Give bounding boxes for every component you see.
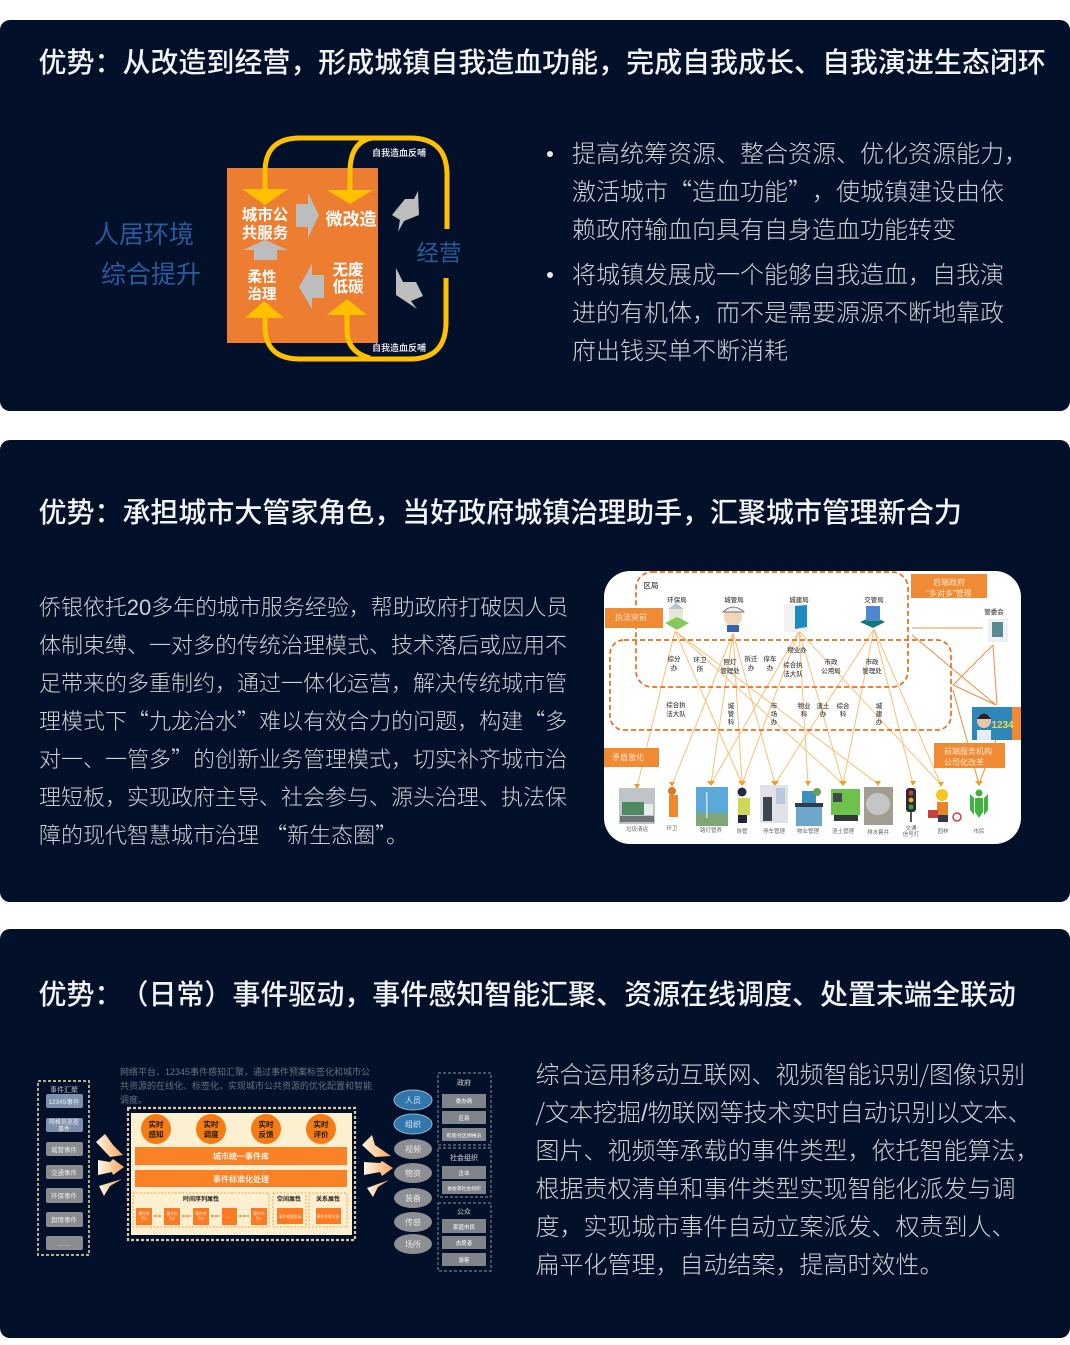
white card (604, 571, 1021, 844)
heading: panel 1: 优势：从改造到经营，形成城镇自我造血功能，完成自我成长、自我演进生态闭环 (38, 47, 1046, 78)
resource ovals: 场所 (405, 1239, 421, 1249)
organisation groups (438, 1073, 491, 1271)
bottom icon captions: 市民 (973, 827, 985, 835)
square labels: 共服务 (242, 223, 289, 242)
description text: 共资源的在线化、标签化，实现城市公共资源的优化配置和智能 (120, 1080, 372, 1091)
central platform: …… (225, 1215, 233, 1219)
central platform: 感知 (148, 1129, 164, 1139)
grey arrows (243, 191, 423, 309)
central platform (128, 1108, 355, 1240)
central platform: 事件关联关系 (317, 1214, 340, 1219)
text block: panel 2 paragraph: 障的现代智慧城市治理 “新生态圈”。 (39, 818, 408, 850)
text block: panel 2 paragraph: 对一、一管多”的创新业务管理模式，切实补齐城市治 (39, 742, 567, 774)
central platform: 空间属性 (277, 1195, 301, 1203)
network diagram: 后端政府 (933, 577, 965, 587)
text block: panel 3 paragraph: 综合运用移动互联网、视频智能识别/图像识别 (536, 1055, 1025, 1090)
description text: 调度。 (120, 1094, 147, 1105)
agency labels: 城 (728, 702, 735, 710)
central platform: 列3 (198, 1216, 204, 1221)
network diagram: 矛盾激化 (612, 752, 644, 762)
agency labels: 交管局 (864, 595, 884, 604)
network diagram: “多对多”管理 (926, 588, 972, 598)
panel: city steward (0, 440, 1070, 902)
central platform: 事件库 (195, 1211, 207, 1216)
agency labels: 管 (728, 709, 735, 718)
agency labels: 环保局 (667, 595, 687, 604)
central platform: 调度 (204, 1129, 219, 1139)
central platform: 事件库 (138, 1211, 150, 1216)
organisation groups: 公众 (457, 1208, 471, 1216)
agency labels: 城建局 (789, 595, 809, 604)
agency labels: 管委会 (984, 607, 1004, 616)
feedback labels: 自我造血反哺 (372, 342, 426, 353)
central platform: 列2 (169, 1216, 175, 1221)
central platform: 反馈 (258, 1129, 274, 1139)
agency labels: 场 (771, 710, 778, 718)
bottom icon captions: 协管 (736, 827, 748, 835)
text block: panel 1 bullets: 赖政府输血向具有自身造血功能转变 (572, 217, 956, 244)
agency labels: 市政 (866, 657, 879, 666)
square labels (242, 205, 376, 303)
bottom icon captions: 物业管理 (797, 827, 819, 835)
organisation groups: 志愿者 (456, 1239, 473, 1247)
panel: self-growth ecosystem (0, 20, 1070, 411)
resource ovals: 组织 (405, 1119, 421, 1129)
agency labels: 环卫 (694, 656, 707, 664)
feedback labels: 自我造血反哺 (372, 147, 426, 158)
bottom icon captions: 垃圾清运 (626, 825, 648, 833)
organisation groups: 游客 (458, 1256, 470, 1264)
text block: panel 1 bullets: 将城镇发展成一个能够自我造血，自我演 (572, 262, 1004, 289)
agency labels: 市 (771, 701, 778, 710)
heading: panel 2: 优势：承担城市大管家角色，当好政府城镇治理助手，汇聚城市管理新合力 (38, 497, 962, 528)
organisation groups: 社会组织 (450, 1153, 478, 1162)
agency labels: 办 (771, 717, 778, 726)
orange tags (604, 574, 1005, 768)
panel: event driven (0, 929, 1070, 1338)
description text (120, 1066, 372, 1105)
text block: panel 2 paragraph: 理短板，实现政府主导、社会参与、源头治理、执法保 (39, 785, 567, 810)
left swoosh arrows (96, 1134, 124, 1196)
agency labels: 综合执 (783, 660, 803, 669)
text block: panel 2 paragraph: 足带来的多重制约，通过一体化运营，解决传统城市管 (39, 671, 567, 696)
central platform: 实时 (258, 1119, 274, 1129)
text block: panel 1 bullets (547, 141, 1028, 365)
agency labels: 市政 (824, 657, 838, 666)
bottom icon captions: 信号灯 (903, 830, 920, 838)
yellow arrowheads (242, 189, 373, 318)
central platform: 事件地理坐标 (279, 1214, 302, 1219)
square labels: 城市公 (242, 205, 289, 224)
agency labels: 法大队 (783, 669, 803, 678)
dashed boxes (610, 572, 951, 730)
agency labels: 综合执 (666, 700, 686, 709)
event sources column: 事件 (58, 1125, 70, 1133)
agency labels: 区局 (644, 581, 658, 590)
agency labels: 科 (728, 717, 735, 726)
central platform: 关系属性 (316, 1195, 340, 1203)
text block: panel 1 bullets: 激活城市“造血功能” ，使城镇建设由依 (572, 172, 1004, 207)
bottom icon captions: 交通 (905, 824, 917, 832)
central platform: 事件库 (253, 1211, 265, 1216)
bottom icon captions: 渣土管理 (832, 827, 854, 835)
network diagram (604, 571, 1021, 844)
description text: 网络平台、12345事件感知汇聚，通过事件预案标签化和城市公 (120, 1066, 370, 1077)
bottom icon captions: 排水窨井 (867, 828, 889, 836)
agency labels: 照灯 (724, 657, 737, 666)
square labels: 微改造 (326, 210, 376, 229)
central platform: 实时 (148, 1119, 164, 1129)
event sources column: …… (58, 1241, 70, 1248)
right swoosh arrows (362, 1135, 393, 1197)
text block: panel 2 paragraph: 侨银依托20多年的城市服务经验，帮助政府打破因人员 (39, 595, 568, 620)
event sources column: 城管事件 (51, 1145, 78, 1154)
yellow feedback loops (265, 138, 447, 359)
square labels: 治理 (248, 285, 277, 303)
resource ovals (394, 1090, 432, 1254)
blue labels (94, 221, 462, 289)
event sources column: 舆情事件 (51, 1215, 78, 1224)
cycle diagram (94, 136, 462, 362)
agency labels: 城 (876, 702, 883, 710)
bottom icon captions: 停车管理 (763, 827, 785, 835)
connection lines (637, 629, 941, 787)
agency labels: 办 (820, 709, 827, 718)
agency labels: 公用局 (821, 667, 841, 675)
text block: panel 3 paragraph (536, 1055, 1040, 1279)
resource ovals: 装备 (405, 1193, 421, 1203)
central platform: 城市统一事件库 (213, 1151, 269, 1161)
organisation groups: 家庭市民 (453, 1223, 475, 1231)
agency labels: 渣土 (816, 701, 830, 710)
service photo (972, 707, 1021, 740)
agency labels: 城管局 (724, 595, 744, 604)
network diagram: 执法突前 (615, 612, 647, 622)
organisation groups: 委办局 (456, 1097, 473, 1105)
organisation groups: 政府 (457, 1078, 471, 1087)
event platform diagram (37, 1066, 492, 1272)
event sources column: 12345事件 (48, 1097, 80, 1106)
agency labels: 所 (697, 664, 704, 673)
bottom icon captions: 环卫 (666, 825, 678, 832)
agency labels: 办 (748, 663, 755, 672)
agency labels: 办 (767, 663, 774, 672)
agency labels: 物业办 (787, 645, 807, 654)
organisation groups: 企业 (458, 1169, 470, 1177)
agency labels: 综分 (668, 654, 681, 663)
central platform: 时间序列属性 (183, 1195, 219, 1203)
resource ovals: 传感 (405, 1217, 421, 1227)
blue labels: 经营 (416, 241, 462, 266)
agency labels: 综合 (836, 701, 850, 710)
text block: panel 3 paragraph: /文本挖掘/物联网等技术实时自动识别以文本、 (536, 1093, 1032, 1128)
bottom icon captions: 园林 (937, 827, 949, 835)
resource ovals: 人员 (405, 1096, 421, 1105)
network diagram: 公司化改革 (944, 757, 984, 767)
agency labels (644, 581, 1004, 726)
network diagram: 前端服务机构 (944, 746, 992, 756)
central platform: 事件标准化处理 (213, 1174, 269, 1184)
organisation groups: 街道/社区网格员 (447, 1132, 482, 1139)
event sources column: 交通事件 (51, 1168, 78, 1177)
text block: panel 3 paragraph: 图片、视频等承载的事件类型，依托智能算法， (536, 1138, 1040, 1165)
agency labels: 建 (876, 709, 883, 718)
square labels: 柔性 (248, 269, 276, 286)
bottom icon captions: 路灯管养 (700, 826, 722, 834)
event sources column: 事件汇聚 (50, 1085, 78, 1094)
text block: panel 3 paragraph: 根据责权清单和事件类型实现智能化派发与调 (536, 1176, 1016, 1203)
network diagram: 34 (1002, 720, 1014, 731)
network diagram: 12 (991, 720, 1003, 731)
agency labels: 管理处 (862, 666, 882, 675)
resource ovals: 视频 (405, 1144, 421, 1154)
agency labels: 科 (840, 709, 847, 718)
arrow tips (634, 781, 983, 789)
text block: panel 1 bullets: 提高统筹资源、整合资源、优化资源能力， (572, 141, 1028, 168)
text block: panel 1 bullets: 府出钱买单不断消耗 (572, 338, 788, 365)
square labels: 低碳 (332, 278, 364, 296)
blue labels: 综合提升 (101, 261, 201, 289)
bottom icon captions (626, 824, 985, 838)
resource ovals: 物资 (405, 1168, 421, 1178)
agency labels: 停车 (764, 654, 777, 663)
text block: panel 3 paragraph: 度，实现城市事件自动立案派发、权责到人、 (536, 1214, 1016, 1241)
agency labels: 科 (801, 709, 808, 718)
event sources column: 环保事件 (51, 1191, 78, 1200)
square labels: 无废 (332, 260, 364, 279)
blue labels: 人居环境 (94, 221, 194, 249)
central platform: 列n (256, 1216, 262, 1221)
agency labels: 管理处 (720, 666, 740, 675)
central platform: 实时 (204, 1119, 219, 1129)
central platform: 评价 (314, 1129, 329, 1139)
agency labels: 法大队 (666, 709, 686, 718)
central platform: 实时 (314, 1119, 329, 1129)
agency labels: 办 (876, 717, 883, 726)
central platform: 列1 (141, 1216, 147, 1221)
text block: panel 2 paragraph: 体制束缚、一对多的传统治理模式、技术落后或应用不 (39, 633, 567, 658)
agency icons (665, 603, 1008, 642)
organisation groups: 区县 (458, 1115, 470, 1122)
organisation groups: 协会等社会组织 (447, 1185, 481, 1192)
feedback labels (372, 147, 426, 353)
central platform: 事件库 (166, 1211, 178, 1216)
agency labels: 办 (671, 663, 678, 672)
event sources column: 网格员巡查 (49, 1118, 79, 1126)
heading: panel 3: 优势： （日常）事件驱动，事件感知智能汇聚、资源在线调度、处置末端全联动 (38, 979, 1016, 1010)
agency labels: 拆迁 (744, 654, 758, 663)
agency labels: 物业 (798, 701, 811, 710)
text block: panel 2 paragraph (39, 595, 568, 850)
bottom icons (619, 785, 988, 826)
text block: panel 1 bullets: 进的有机体，而不是需要源源不断地靠政 (572, 300, 1004, 327)
text block: panel 2 paragraph: 理模式下“九龙治水”难以有效合力的问题，构建“多 (39, 704, 567, 736)
orange square (227, 168, 378, 343)
text block: panel 3 paragraph: 扁平化管理，自动结案，提高时效性。 (536, 1252, 944, 1279)
event sources column (38, 1081, 89, 1255)
